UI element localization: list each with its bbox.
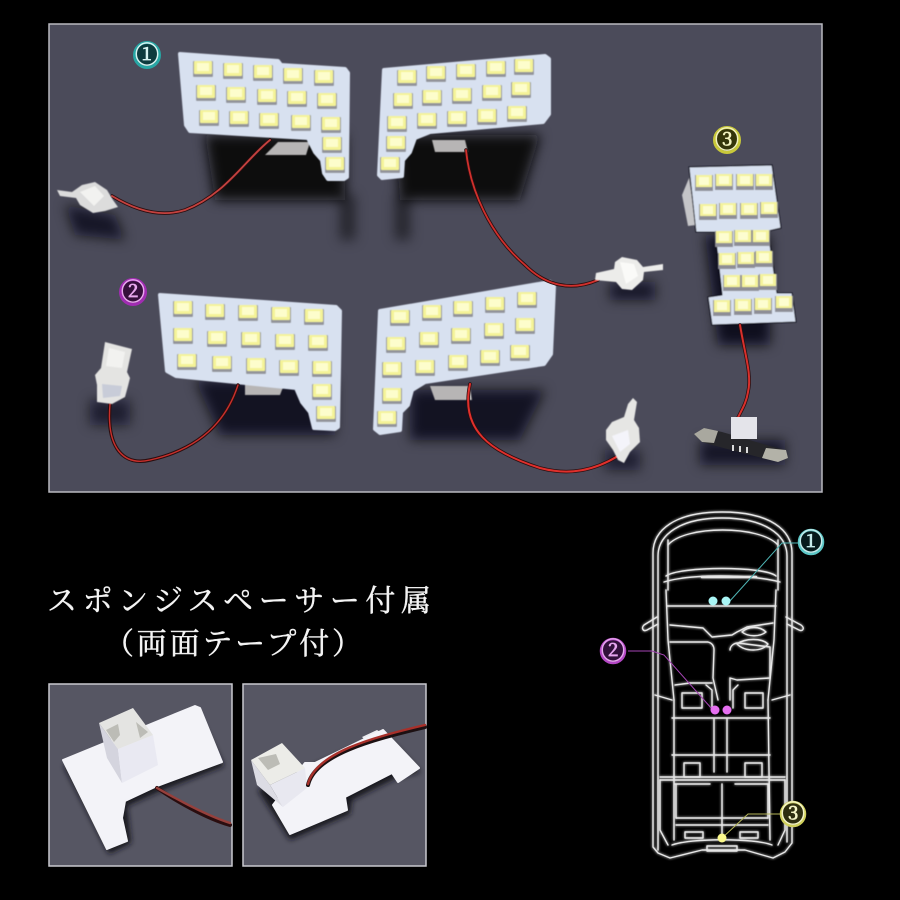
wires	[109, 140, 749, 472]
callout 2: ②	[601, 638, 625, 665]
bulb connector 1	[57, 182, 118, 213]
vehicle top-view diagram	[643, 512, 803, 858]
rear row	[675, 784, 768, 838]
foam block	[99, 708, 158, 783]
lamp board 3	[682, 165, 796, 325]
mirrors	[643, 617, 803, 631]
wire	[157, 788, 230, 825]
marker 3: ③	[715, 127, 739, 154]
tab	[362, 730, 385, 743]
panel: spacer photo left	[49, 684, 232, 866]
callout 2	[601, 638, 732, 714]
heading line 2: （両面テープ付）	[104, 628, 362, 661]
callout 3: ③	[781, 801, 805, 828]
plate	[273, 730, 419, 834]
shadows under the lamp boards	[65, 135, 785, 470]
marker 2: ②	[121, 279, 145, 306]
bulb connector 3	[95, 342, 132, 404]
callout 3	[718, 801, 805, 842]
panel: product photo	[49, 24, 822, 492]
middle row	[672, 718, 770, 772]
foam block	[251, 743, 307, 807]
lamp board 2 right	[375, 282, 554, 433]
lamp board 1 left	[180, 54, 348, 179]
panel: spacer photo right	[243, 684, 426, 866]
wire	[308, 725, 425, 785]
dashboard	[670, 623, 773, 637]
inner body line	[658, 518, 787, 850]
front seats	[670, 642, 718, 700]
body outline	[653, 512, 792, 858]
lamp board 2 left	[160, 295, 340, 429]
festoon bulb	[694, 417, 788, 462]
callout 1	[708, 529, 823, 606]
callout 1: ①	[799, 529, 823, 556]
lamp board 1 right	[379, 56, 549, 178]
heading line 1: スポンジスペーサー付属	[47, 585, 431, 618]
side lines	[674, 700, 770, 840]
plate	[63, 706, 222, 849]
marker 1: ①	[135, 42, 159, 69]
bulb connector 2	[595, 257, 663, 290]
windshield	[664, 568, 780, 700]
bulb connector 4	[606, 398, 640, 463]
heading: sponge spacer included	[47, 585, 431, 661]
